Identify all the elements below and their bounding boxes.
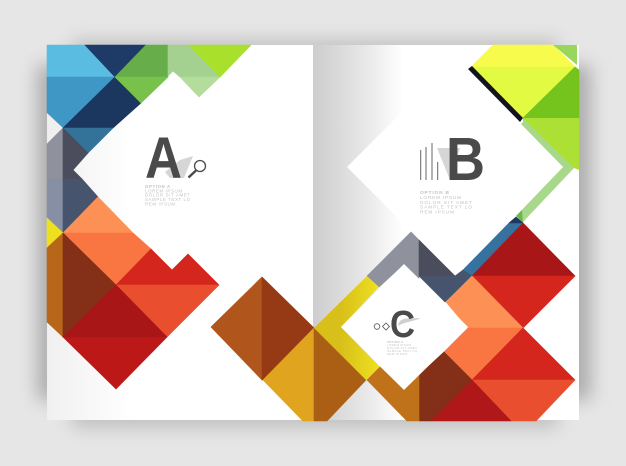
panel: diamond B bbox=[347, 59, 563, 275]
panel: right page bbox=[313, 45, 579, 420]
text block: option B: DOLOR SIT AMET bbox=[420, 200, 472, 206]
text block: option B: OPTION B bbox=[420, 190, 450, 196]
text block: option B: SAMPLE TEXT LO bbox=[420, 205, 472, 211]
mosaic: right page top green triangles bbox=[471, 45, 579, 223]
mosaic: right page warm triangles bbox=[367, 223, 575, 421]
text block: option C: SAMPLE TEXT LO bbox=[387, 349, 418, 353]
mosaic: yellow band bbox=[314, 276, 380, 380]
text block: option B bbox=[420, 190, 472, 215]
text block: option B: REM IPSUM bbox=[420, 209, 454, 215]
text block: option A: SAMPLE TEXT LO bbox=[145, 197, 191, 202]
panel: diamond C bbox=[341, 264, 468, 390]
icon: magnifier bbox=[188, 160, 206, 178]
text block: option C: DOLOR SIT AMET bbox=[387, 346, 417, 350]
text block: option C bbox=[387, 340, 418, 356]
text block: option A: OPTION A bbox=[145, 184, 171, 189]
text block: option C: REM IPSUM bbox=[387, 352, 408, 356]
icon: vertical bars bbox=[421, 143, 438, 180]
text block: option B: LOREM IPSUM bbox=[420, 195, 461, 201]
mosaic: left page warm triangles bbox=[47, 197, 219, 389]
panel: left page bbox=[47, 45, 313, 420]
drop shadow behind brochure bbox=[37, 40, 591, 428]
heading: letter C with swoosh: C bbox=[390, 304, 415, 346]
mosaic: centre brown diamond and gold bbox=[211, 277, 366, 421]
mosaic: right page cool bands bbox=[367, 217, 523, 302]
mosaic: left page top triangles bbox=[47, 45, 251, 233]
heading: letter A with swoosh: A bbox=[145, 126, 182, 191]
heading: letter B with swoosh: B bbox=[446, 125, 485, 193]
text block: option A: REM IPSUM bbox=[145, 201, 175, 206]
text block: option C: LOREM IPSUM bbox=[387, 343, 412, 347]
black diagonal band bbox=[468, 66, 523, 122]
icon: circle and diamond bbox=[374, 323, 390, 330]
text block: option A bbox=[145, 184, 191, 206]
text block: option A: DOLOR SIT AMET bbox=[145, 193, 190, 198]
text block: option A: LOREM IPSUM bbox=[145, 188, 182, 193]
text block: option C: OPTION C bbox=[387, 340, 404, 344]
